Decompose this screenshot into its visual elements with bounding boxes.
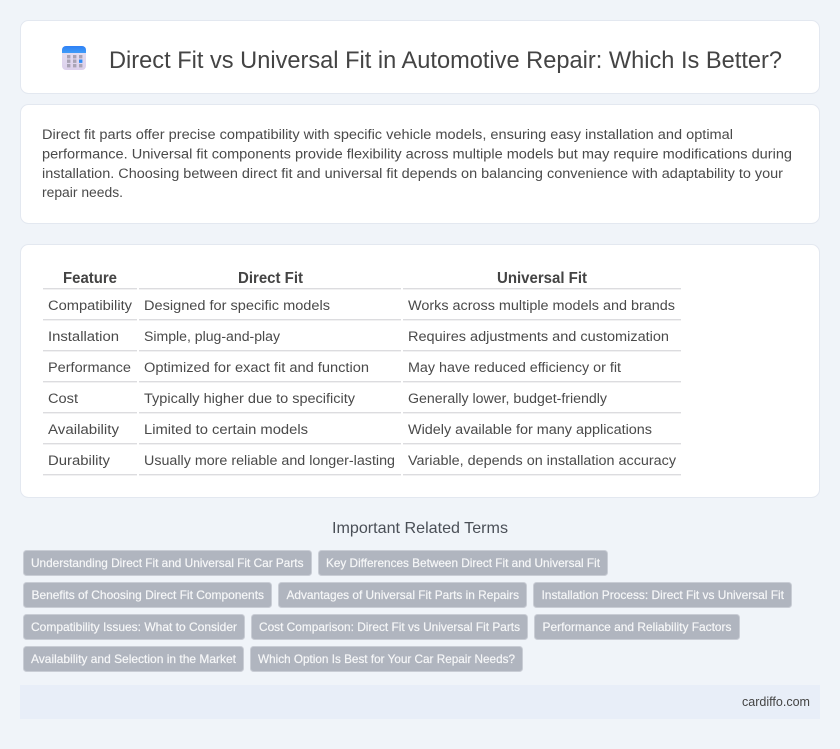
tag bbox=[24, 582, 272, 608]
tag bbox=[24, 550, 312, 576]
tag: Benefits of Choosing Direct Fit Components bbox=[32, 588, 264, 602]
panel: title header bbox=[20, 20, 820, 94]
table row: availability: Limited to certain models bbox=[144, 422, 308, 438]
table row: installation: Simple, plug-and-play bbox=[144, 329, 281, 345]
tag bbox=[250, 646, 522, 672]
table row: compatibility: Designed for specific models bbox=[144, 298, 330, 314]
title: Direct Fit vs Universal Fit in Automotive Repair: Which Is Better? bbox=[109, 47, 782, 74]
table row: cost bbox=[48, 391, 608, 407]
footer text: cardiffo.com bbox=[742, 694, 810, 709]
tag bbox=[24, 646, 244, 672]
icon: calendar bbox=[62, 46, 86, 70]
tag: Availability and Selection in the Market bbox=[31, 652, 237, 666]
heading: important related terms: Important Related Terms bbox=[332, 520, 508, 537]
table row: cost: Generally lower, budget-friendly bbox=[408, 391, 608, 407]
table row: availability: Widely available for many applications bbox=[408, 422, 652, 438]
table row: availability: Availability bbox=[48, 422, 120, 438]
tag: Cost Comparison: Direct Fit vs Universal Fit Parts bbox=[259, 620, 520, 634]
tag bbox=[278, 582, 526, 608]
table header row: Feature bbox=[63, 270, 117, 287]
text block: intro paragraph: installation. Choosing between direct fit and universal fit depends on balancing convenience with adaptability to your bbox=[42, 166, 783, 182]
tag: Compatibility Issues: What to Consider bbox=[31, 620, 237, 634]
table row: durability: Durability bbox=[48, 453, 111, 469]
footer bar bbox=[20, 685, 820, 719]
panel: introduction bbox=[20, 104, 820, 224]
table row: performance: May have reduced efficiency or fit bbox=[408, 360, 621, 376]
tag bbox=[534, 614, 740, 640]
table row: performance bbox=[48, 360, 621, 376]
tag: Performance and Reliability Factors bbox=[542, 620, 732, 634]
tag: Understanding Direct Fit and Universal Fit Car Parts bbox=[31, 556, 304, 570]
text block: intro paragraph bbox=[42, 127, 792, 201]
table row: durability: Usually more reliable and longer-lasting bbox=[144, 453, 395, 469]
table row: performance: Performance bbox=[48, 360, 131, 376]
tag: Advantages of Universal Fit Parts in Repairs bbox=[286, 588, 519, 602]
table row: performance: Optimized for exact fit and function bbox=[144, 360, 369, 376]
text block: intro paragraph: repair needs. bbox=[42, 185, 123, 201]
table row: installation bbox=[48, 329, 669, 345]
table row: installation: Requires adjustments and customization bbox=[408, 329, 669, 345]
table row: durability bbox=[48, 453, 677, 469]
tag bbox=[318, 550, 608, 576]
tag bbox=[24, 614, 244, 640]
table header row: Direct Fit bbox=[238, 270, 304, 287]
table row: durability: Variable, depends on installation accuracy bbox=[408, 453, 677, 469]
panel: comparison table bbox=[20, 244, 820, 498]
table row: availability bbox=[48, 422, 652, 438]
text block: intro paragraph: Direct fit parts offer precise compatibility with specific vehicle models, ensuring easy installation and optimal bbox=[42, 127, 733, 143]
table row: compatibility: Compatibility bbox=[48, 298, 133, 314]
table row: cost: Cost bbox=[48, 391, 78, 407]
tag bbox=[252, 614, 528, 640]
tag: Installation Process: Direct Fit vs Universal Fit bbox=[542, 588, 785, 602]
text block: intro paragraph: performance. Universal fit components provide flexibility across multiple models but may require modifications during bbox=[42, 146, 792, 162]
table header row bbox=[63, 270, 588, 287]
tag: Which Option Is Best for Your Car Repair Needs? bbox=[258, 652, 515, 666]
panel: related term tags bbox=[24, 550, 792, 672]
tag: Key Differences Between Direct Fit and Universal Fit bbox=[326, 556, 601, 570]
table row: compatibility bbox=[48, 298, 675, 314]
table row: compatibility: Works across multiple models and brands bbox=[408, 298, 675, 314]
table row: installation: Installation bbox=[48, 329, 119, 345]
table row: cost: Typically higher due to specificity bbox=[144, 391, 356, 407]
table header row: Universal Fit bbox=[497, 270, 588, 287]
tag bbox=[534, 582, 792, 608]
